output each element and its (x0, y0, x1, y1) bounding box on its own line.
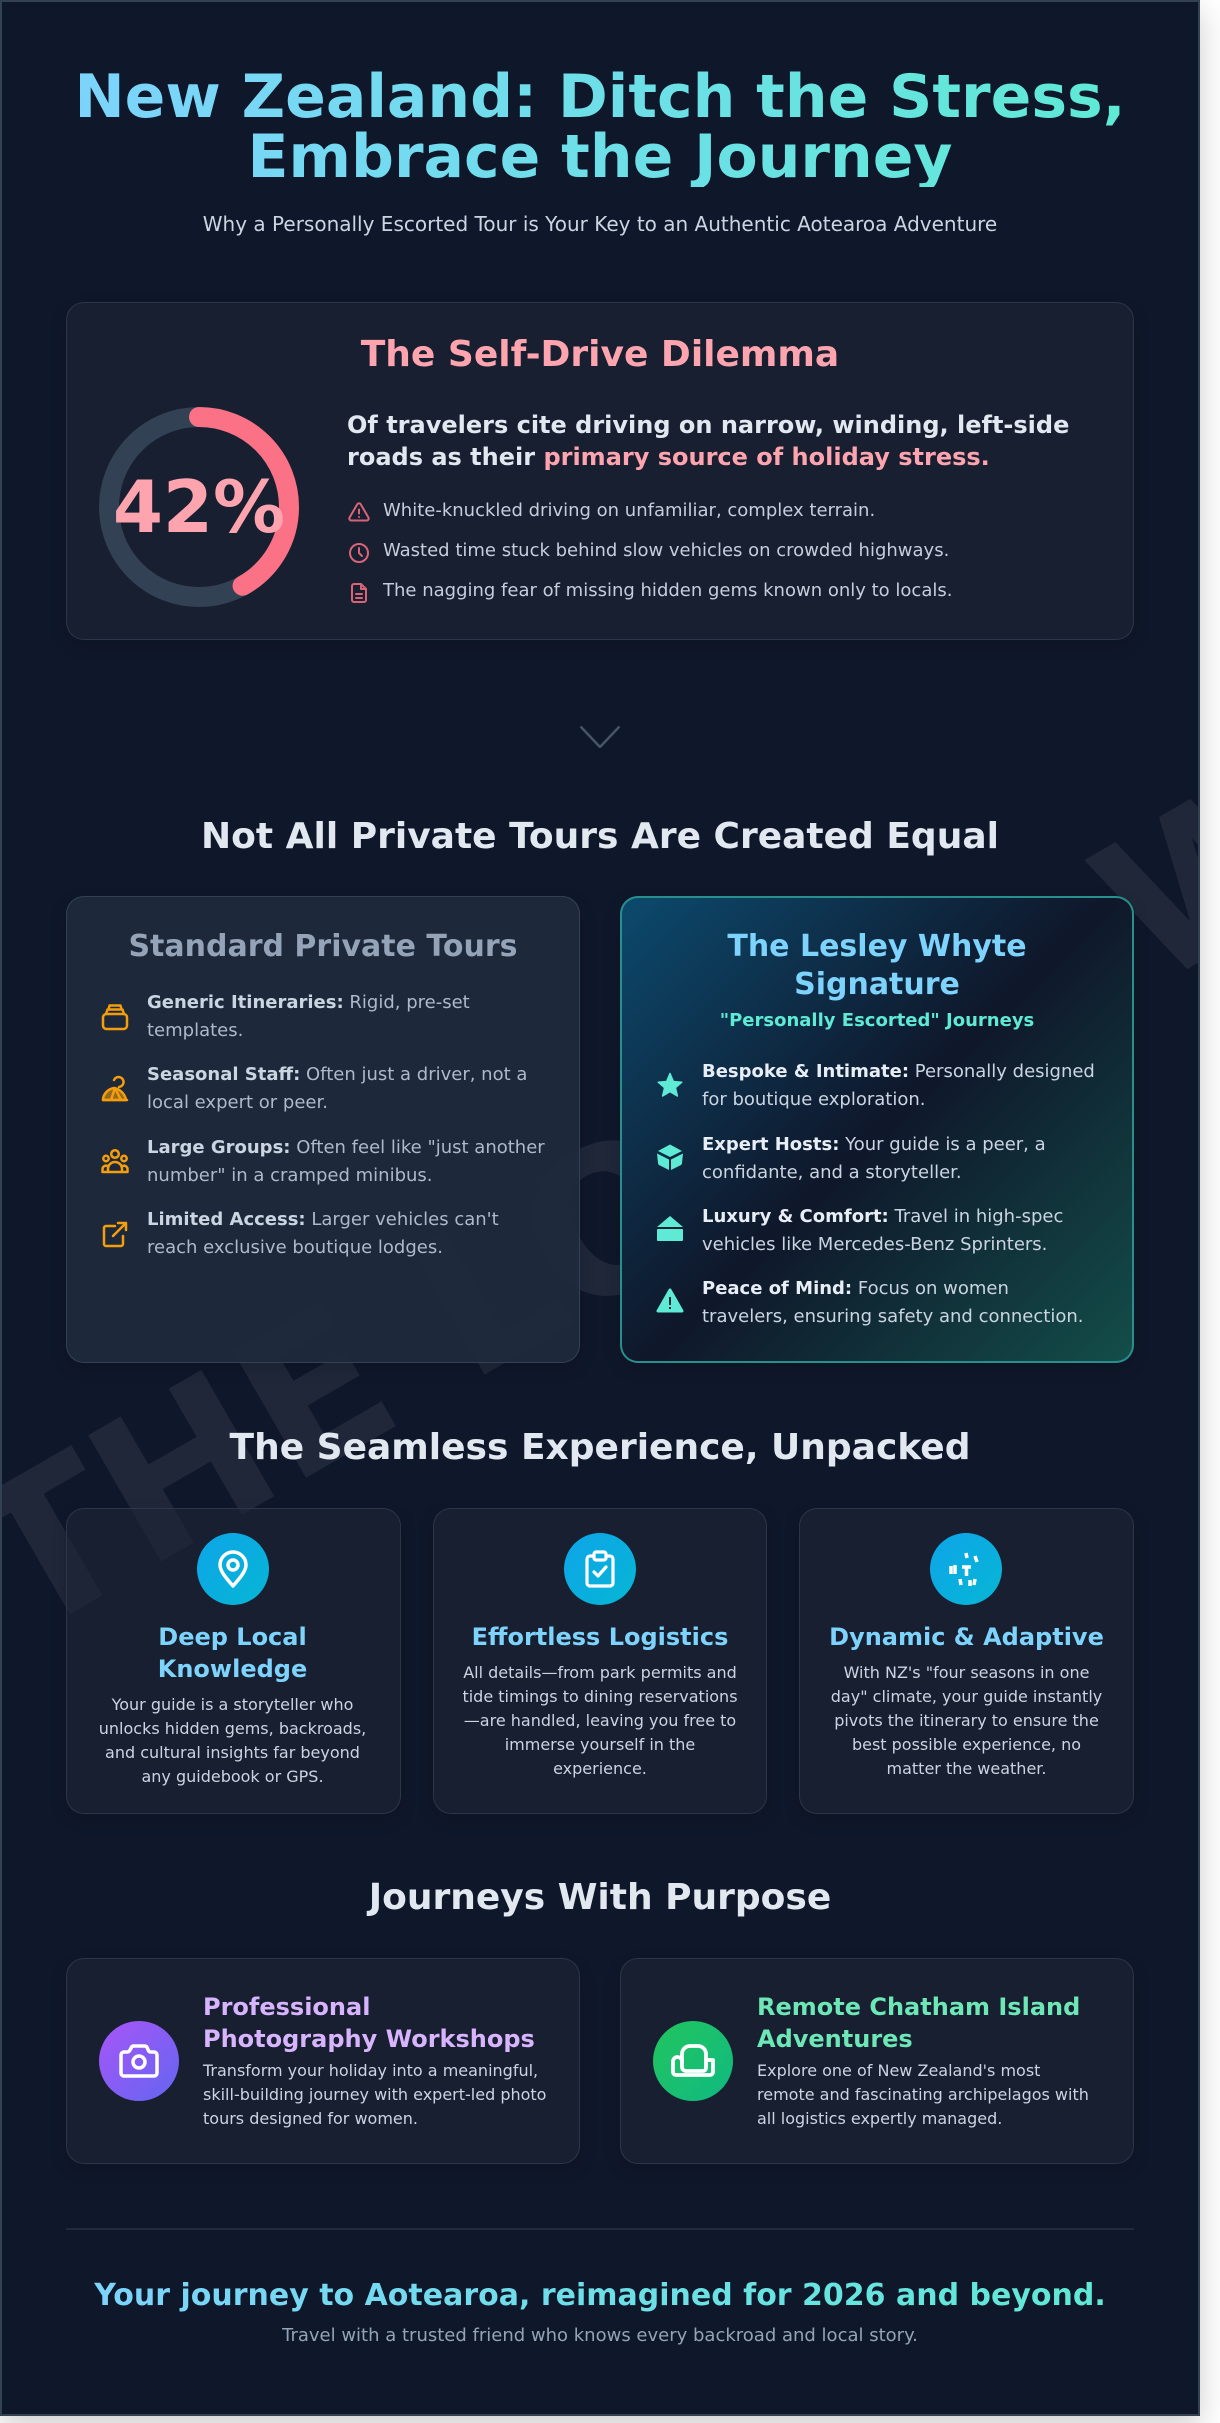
donut chart 42%: 42% (113, 465, 285, 549)
card body (202, 2060, 546, 2128)
item: generic itineraries: templates. (147, 1020, 243, 1041)
item: seasonal staff (147, 1064, 527, 1113)
subtitle: Why a Personally Escorted Tour is Your Key to an Authentic Aotearoa Adventure (203, 212, 997, 236)
card title: Photography Workshops (203, 2024, 535, 2052)
card title: Deep Local (158, 1623, 307, 1651)
icon: group of people (101, 1149, 129, 1174)
card body (757, 2060, 1089, 2128)
card body (99, 1694, 366, 1786)
card body: —are handled, leaving you free to (464, 1710, 736, 1730)
card body: experience. (553, 1758, 647, 1778)
panel heading: Standard Private Tours (128, 929, 518, 964)
heading: comparison: Not All Private Tours Are Created Equal (201, 816, 999, 857)
stat description: Of travelers cite driving on narrow, winding, left-side (347, 411, 1069, 439)
bullet text 3: The nagging fear of missing hidden gems known only to locals. (383, 580, 952, 601)
card body: remote and fascinating archipelagos with (757, 2084, 1089, 2104)
title: Embrace the Journey (247, 122, 953, 192)
card body: pivots the itinerary to ensure the (834, 1710, 1099, 1730)
item: limited access: reach exclusive boutique lodges. (147, 1237, 443, 1258)
item: large groups (147, 1137, 545, 1186)
panel subheading: "Personally Escorted" Journeys (720, 1010, 1034, 1031)
title: New Zealand: Ditch the Stress, (74, 62, 1126, 132)
item: bespoke: for boutique exploration. (702, 1089, 926, 1110)
icon: star (657, 1072, 682, 1097)
icon: warning (348, 502, 370, 522)
item: bespoke: Bespoke & Intimate: Personally designed (702, 1061, 1095, 1082)
card body: all logistics expertly managed. (757, 2108, 1002, 2128)
item: peace of mind (702, 1278, 1083, 1327)
panel heading: Signature (794, 966, 960, 1002)
heading: journeys with purpose: Journeys With Purpose (369, 1876, 831, 1918)
panel: dynamic and adaptive (799, 1508, 1134, 1814)
icon: archive box (102, 1004, 128, 1030)
card body: Explore one of New Zealand's most (757, 2060, 1040, 2080)
bullet text 1: White-knuckled driving on unfamiliar, complex terrain. (383, 500, 875, 521)
card body: All details—from park permits and (463, 1662, 737, 1682)
item: generic itineraries: Generic Itineraries: Rigid, pre-set (147, 992, 470, 1013)
item: seasonal staff: Seasonal Staff: Often just a driver, not a (147, 1064, 527, 1085)
icon: adaptive fragments (930, 1533, 1002, 1605)
card body: and cultural insights far beyond (105, 1742, 360, 1762)
card title: Adventures (757, 2024, 913, 2052)
icon: alert triangle (656, 1288, 684, 1312)
stat description: roads as their primary source of holiday stress. (347, 443, 990, 471)
item: large groups: number" in a cramped minibus. (147, 1165, 433, 1186)
card body: Your guide is a storyteller who (112, 1694, 353, 1714)
card title: Professional (203, 1992, 370, 2020)
panel: standard private tours (66, 896, 580, 1363)
card title (203, 1992, 535, 2052)
stat description (347, 411, 1069, 471)
panel heading: The Self-Drive Dilemma (361, 334, 839, 375)
card body: tide timings to dining reservations (462, 1686, 738, 1706)
card body: tours designed for women. (203, 2108, 418, 2128)
icon: document (351, 583, 367, 603)
panel: chatham island (620, 1958, 1134, 2164)
panel: photography workshops (66, 1958, 580, 2164)
item: bespoke (702, 1061, 1095, 1110)
icon: home shape (657, 1216, 683, 1241)
item: luxury: vehicles like Mercedes-Benz Sprinters. (702, 1234, 1047, 1255)
arrow: chevron down (580, 726, 620, 748)
item: expert hosts: confidante, and a storyteller. (702, 1162, 962, 1183)
item: expert hosts (702, 1134, 1046, 1183)
card body (462, 1662, 738, 1778)
icon: armchair (653, 2021, 733, 2101)
card body: matter the weather. (886, 1758, 1046, 1778)
card body: unlocks hidden gems, backroads, (99, 1718, 366, 1738)
item: expert hosts: Expert Hosts: Your guide is a peer, a (702, 1134, 1046, 1155)
card title: Effortless Logistics (472, 1623, 728, 1651)
card title (757, 1992, 1080, 2052)
card title: Dynamic & Adaptive (829, 1623, 1104, 1651)
card body: Transform your holiday into a meaningful, (203, 2060, 538, 2080)
panel: the lesley whyte signature (620, 896, 1134, 1363)
card body (831, 1662, 1102, 1778)
panel heading (727, 929, 1027, 1002)
card body: best possible experience, no (852, 1734, 1081, 1754)
card body: skill-building journey with expert-led photo (203, 2084, 546, 2104)
icon: external link (102, 1222, 128, 1248)
heading: seamless experience: The Seamless Experience, Unpacked (230, 1427, 970, 1468)
title (60, 67, 1140, 187)
icon: hook and dome (102, 1076, 128, 1102)
bullet text 2: Wasted time stuck behind slow vehicles on crowded highways. (383, 540, 949, 561)
footer headline: Your journey to Aotearoa, reimagined for 2026 and beyond. (94, 2278, 1106, 2313)
item: large groups: Large Groups: Often feel like "just another (147, 1137, 545, 1158)
item: seasonal staff: local expert or peer. (147, 1092, 328, 1113)
icon: map pin (197, 1533, 269, 1605)
icon: camera (99, 2021, 179, 2101)
card title (158, 1623, 307, 1683)
footer tagline: Travel with a trusted friend who knows every backroad and local story. (282, 2325, 918, 2346)
panel: deep local knowledge (66, 1508, 401, 1814)
item: generic itineraries (147, 992, 470, 1041)
icon: clipboard check (564, 1533, 636, 1605)
card body: day" climate, your guide instantly (831, 1686, 1102, 1706)
card body: any guidebook or GPS. (141, 1766, 324, 1786)
item: limited access (147, 1209, 499, 1258)
card title: Remote Chatham Island (757, 1992, 1080, 2020)
card title: Knowledge (158, 1655, 307, 1683)
item: luxury (702, 1206, 1063, 1255)
panel: self-drive dilemma (66, 302, 1134, 640)
icon: clock (349, 543, 369, 563)
item: luxury: Luxury & Comfort: Travel in high-spec (702, 1206, 1063, 1227)
panel heading: The Lesley Whyte (727, 929, 1027, 964)
item: peace of mind: travelers, ensuring safety and connection. (702, 1306, 1083, 1327)
item: limited access: Limited Access: Larger vehicles can't (147, 1209, 499, 1230)
item: peace of mind: Peace of Mind: Focus on women (702, 1278, 1009, 1299)
donut chart 42% (99, 407, 299, 607)
icon: cube (657, 1144, 683, 1170)
card body: With NZ's "four seasons in one (844, 1662, 1089, 1682)
card body: immerse yourself in the (505, 1734, 695, 1754)
panel: effortless logistics (433, 1508, 767, 1814)
